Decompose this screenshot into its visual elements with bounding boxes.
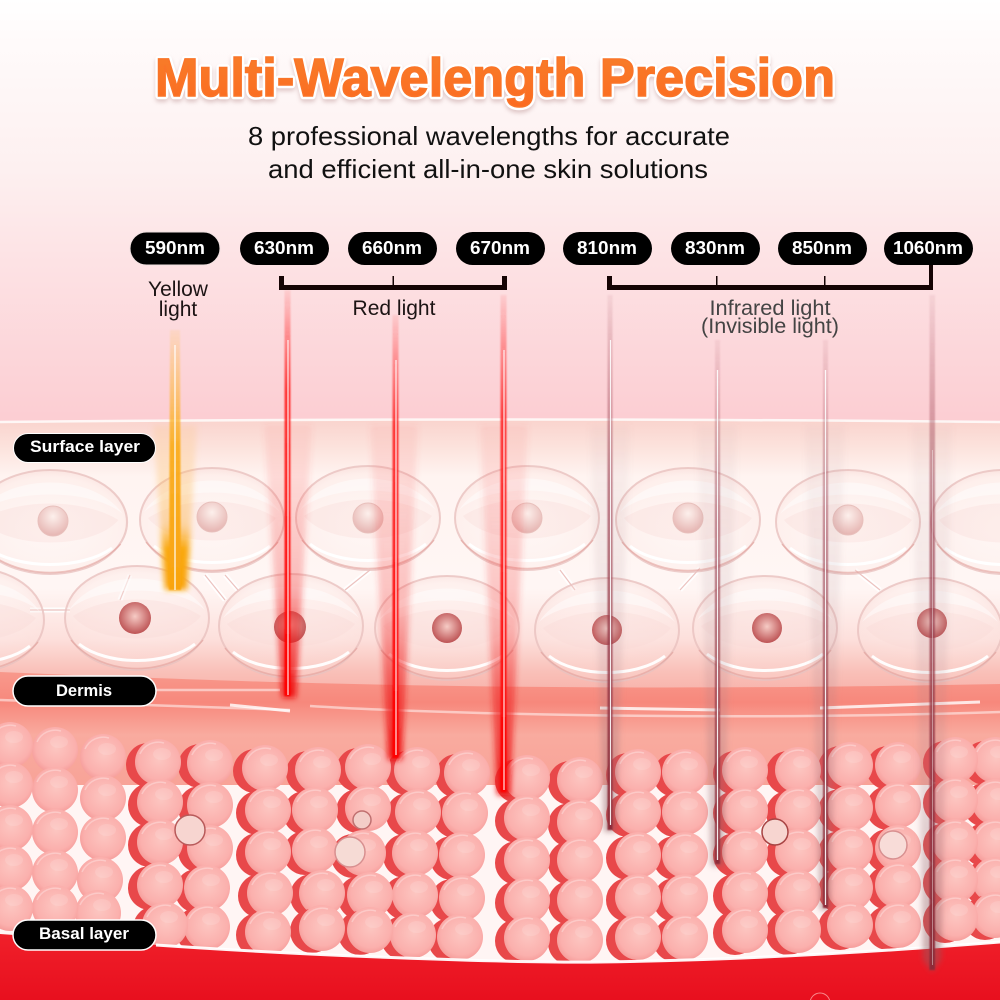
- subtitle: and efficient all-in-one skin solutions: [268, 154, 708, 184]
- bracket: infrared light: [607, 265, 933, 290]
- label: 850nm: [778, 232, 867, 265]
- label: dermis: Dermis: [56, 681, 112, 700]
- subtitle: [248, 121, 730, 184]
- beam: 1060nm infrared: [912, 295, 952, 972]
- beam: 660nm red: [370, 315, 418, 760]
- label: 630nm: 630nm: [254, 238, 314, 258]
- panel: basal base: [0, 934, 1000, 1000]
- upper cell row: [0, 466, 1000, 574]
- wavelength labels: [130, 232, 973, 265]
- lower cell row: [0, 566, 1000, 682]
- label: 1060nm: 1060nm: [893, 238, 963, 258]
- title: Multi-Wavelength Precision: [155, 51, 835, 111]
- label: 810nm: [563, 232, 652, 265]
- label: 630nm: [240, 232, 329, 265]
- label: surface layer: [14, 434, 156, 462]
- label: 1060nm: [884, 232, 973, 265]
- label: 670nm: 670nm: [470, 238, 530, 258]
- text: yellow light: light: [159, 298, 197, 321]
- label: 810nm: 810nm: [577, 238, 637, 258]
- beam: 830nm infrared: [697, 340, 737, 866]
- label: 830nm: [671, 232, 760, 265]
- text: red light: Red light: [353, 297, 436, 320]
- text: yellow light: [148, 278, 209, 321]
- title: Multi-Wavelength Precision: [155, 48, 835, 108]
- panel: surface layer cells: [0, 418, 1000, 700]
- bracket: red light: [279, 276, 507, 290]
- beam: 850nm infrared: [805, 340, 845, 910]
- subtitle: 8 professional wavelengths for accurate: [248, 121, 730, 151]
- panel: dermis layer: [0, 672, 1000, 800]
- beam: 590nm yellow: [153, 330, 197, 590]
- label: basal layer: Basal layer: [39, 924, 129, 943]
- beam: 630nm red: [264, 290, 312, 698]
- beam: 670nm red: [480, 295, 528, 795]
- text: infrared light: Infrared light: [710, 297, 831, 320]
- beam: 810nm infrared: [590, 295, 630, 832]
- label: surface layer: Surface layer: [30, 437, 140, 456]
- label: 660nm: [348, 232, 437, 265]
- background: [0, 0, 1000, 425]
- text: infrared light: (Invisible light): [701, 315, 839, 338]
- label: dermis: [13, 676, 156, 706]
- label: 830nm: 830nm: [685, 238, 745, 258]
- label: 850nm: 850nm: [792, 238, 852, 258]
- title: Multi-Wavelength Precision: [155, 48, 835, 108]
- label: basal layer: [13, 920, 156, 950]
- label: 590nm: [130, 232, 220, 265]
- text: yellow light: Yellow: [148, 278, 209, 301]
- label: 660nm: 660nm: [362, 238, 422, 258]
- label: 590nm: 590nm: [145, 238, 205, 258]
- text: infrared light: [701, 297, 839, 338]
- label: 670nm: [456, 232, 545, 265]
- panel: basal layer spheres: [0, 722, 1000, 965]
